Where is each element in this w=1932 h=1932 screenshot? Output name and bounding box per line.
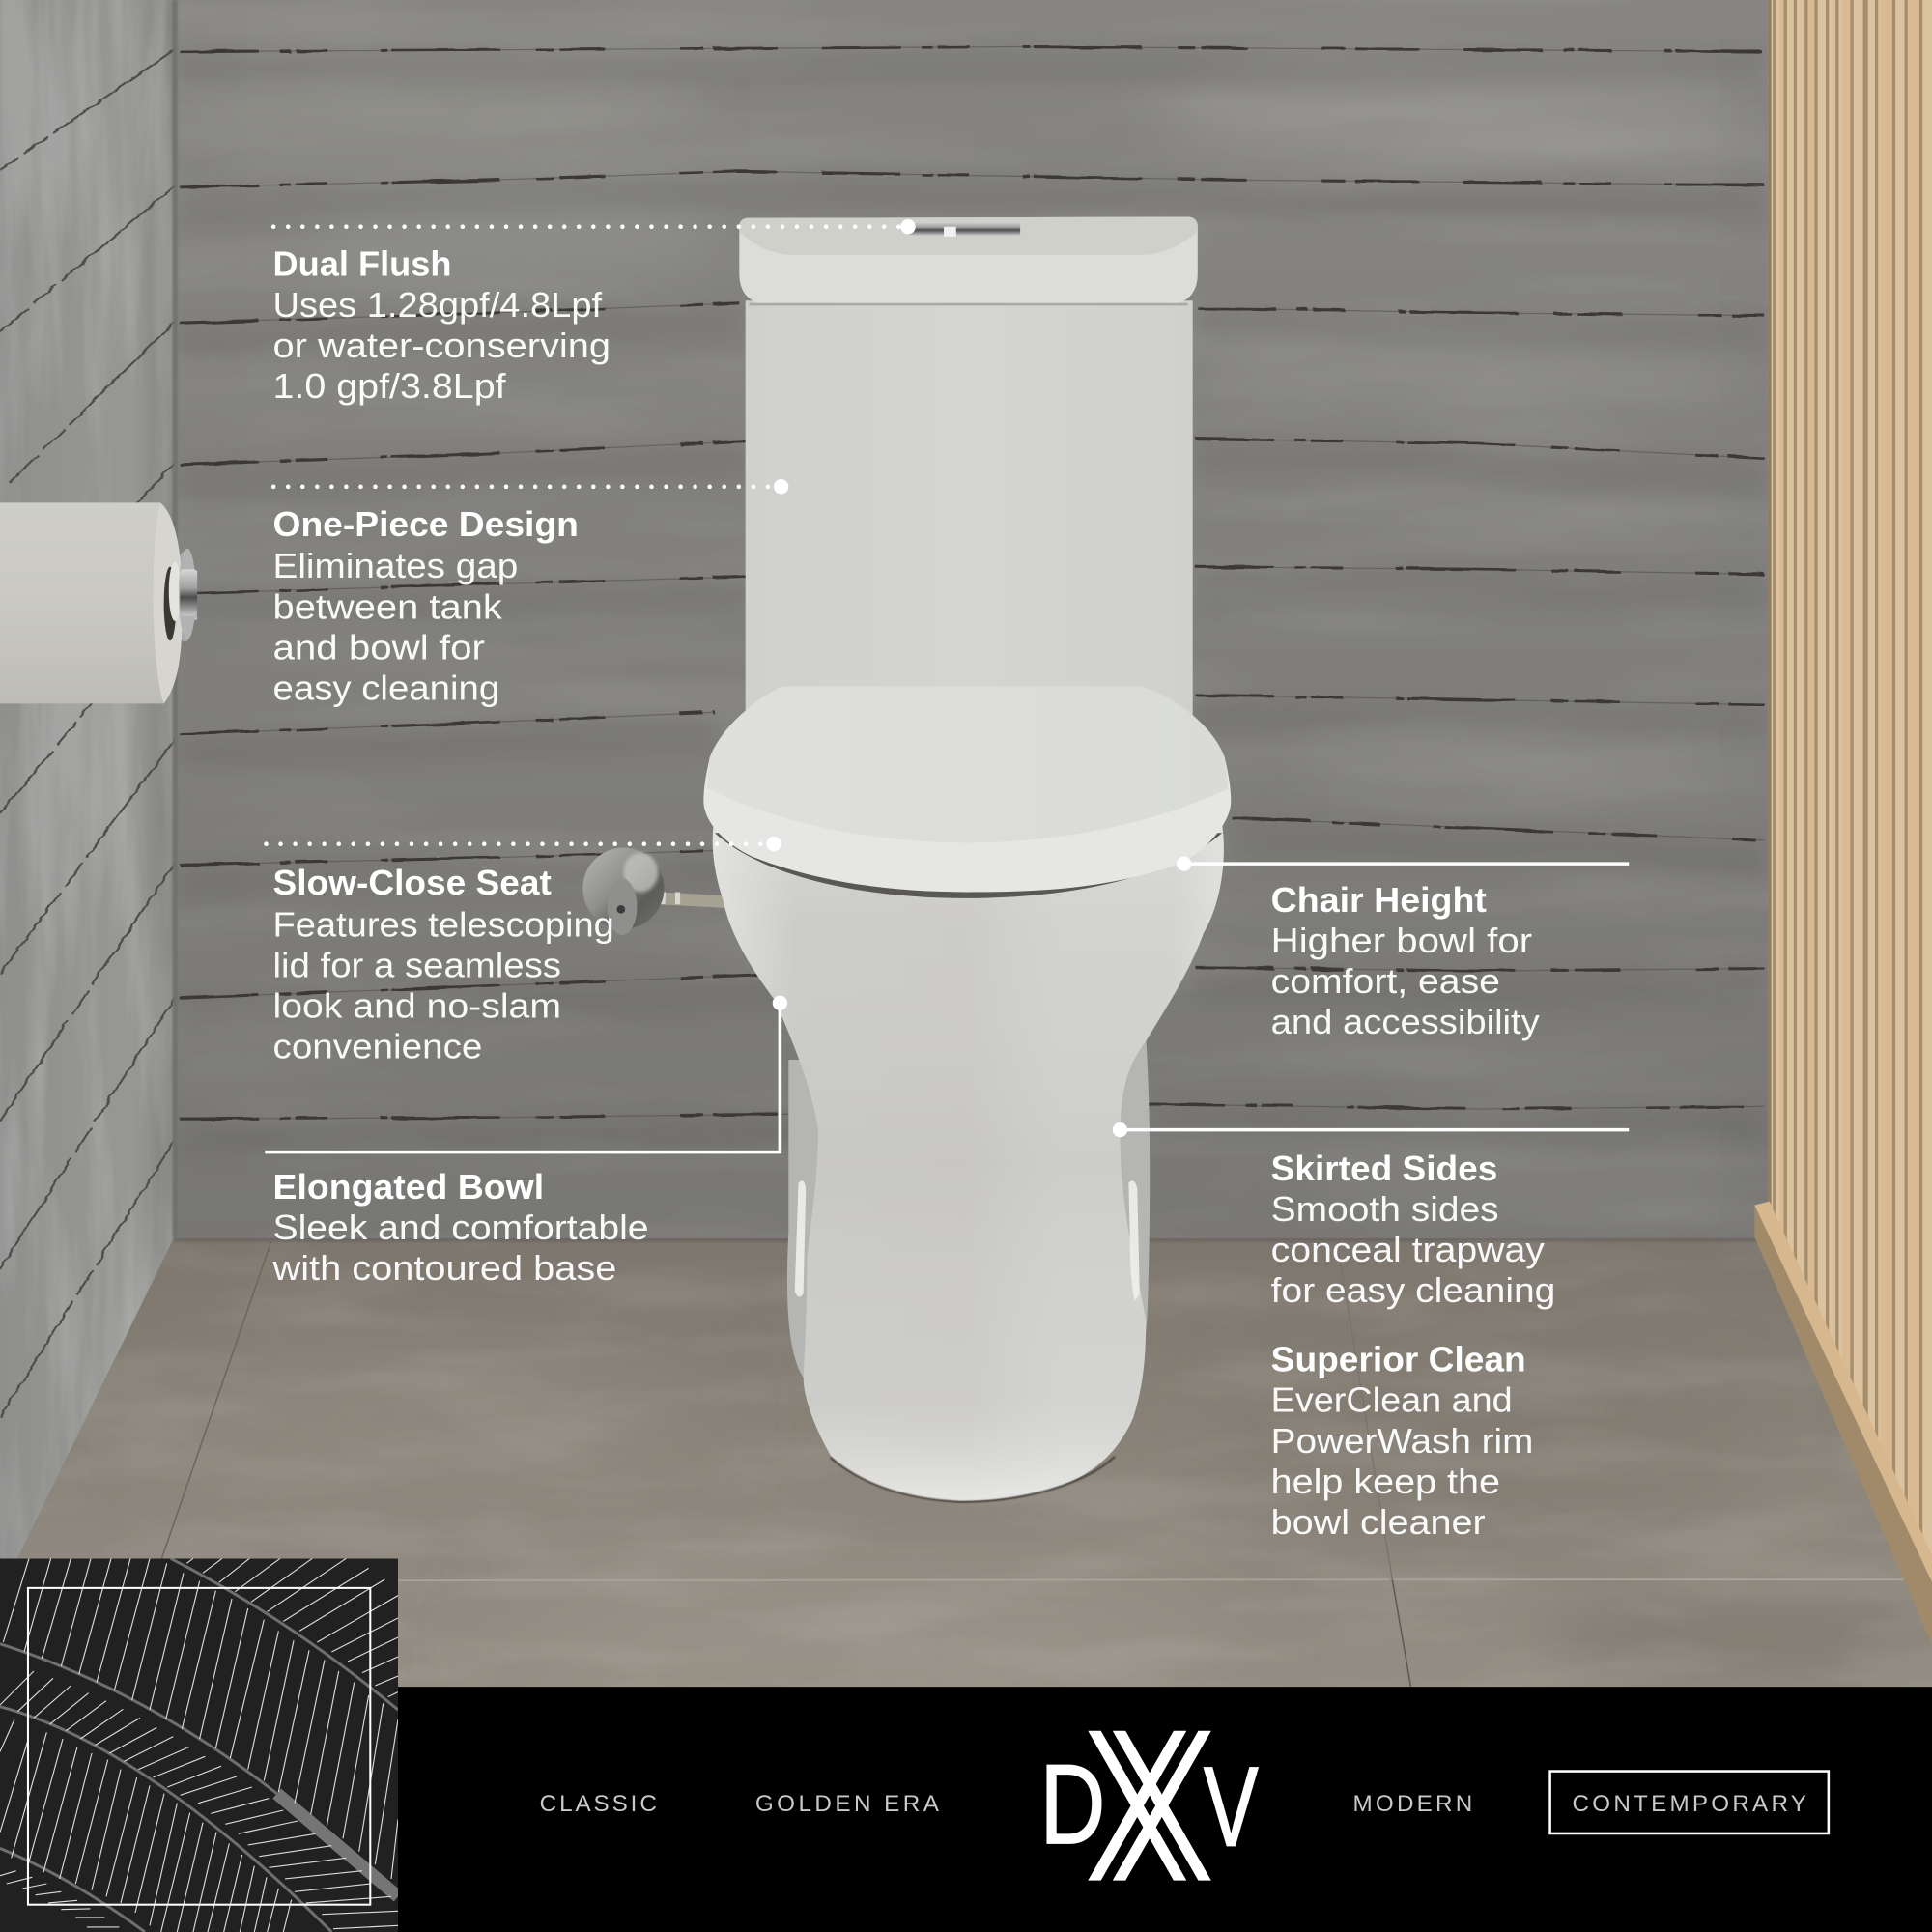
toilet skirt side panels [787,1037,1150,1392]
flush button [908,222,1020,237]
frame inside pattern [28,1588,370,1905]
nav label: Golden Era: GOLDEN ERA [755,1791,940,1817]
callout: Slow-Close Seat: Slow-Close Seat [273,864,552,902]
callout: Elongated Bowl: Elongated Bowl [273,1168,544,1207]
callout: Skirted Sides: Smooth sides [1271,1190,1499,1229]
callout: Superior Clean: bowl cleaner [1271,1503,1486,1542]
DXV logo: V [1204,1743,1259,1870]
callout: Elongated Bowl [265,996,787,1288]
toilet tank body [746,300,1193,744]
callout: One-Piece Design [273,479,788,707]
panel: bathroom back wall [160,0,1786,1240]
callout: One-Piece Design: Eliminates gap [273,547,518,585]
callout: Slow-Close Seat: convenience [273,1028,482,1066]
callout: Superior Clean: EverClean and [1271,1381,1513,1420]
icon: water supply valve [582,848,727,935]
callout: Chair Height [1177,856,1629,1041]
callout: Elongated Bowl: Sleek and comfortable [273,1208,649,1247]
nav label: Contemporary (selected): CONTEMPORARY [1573,1791,1806,1817]
callout: One-Piece Design: One-Piece Design [273,505,579,544]
callout: Slow-Close Seat: lid for a seamless [273,946,561,984]
callout: Skirted Sides: for easy cleaning [1271,1271,1555,1310]
callout: Superior Clean: PowerWash rim [1271,1422,1533,1461]
tank lid [739,216,1198,305]
callout: Slow-Close Seat: Features telescoping [273,905,614,944]
callout: One-Piece Design: and bowl for [273,628,485,667]
callout: Skirted Sides: conceal trapway [1271,1231,1545,1269]
callout: Slow-Close Seat: look and no-slam [273,987,561,1026]
callout: Chair Height: comfort, ease [1271,962,1500,1001]
callout: Superior Clean [1271,1341,1533,1542]
DXV logo [1040,1731,1259,1881]
highlight slits [795,1180,1140,1301]
bowl body [713,826,1224,1502]
callout: Superior Clean: Superior Clean [1271,1341,1526,1379]
icon: toilet paper roll and holder [0,502,197,703]
callout: Superior Clean: help keep the [1271,1463,1500,1501]
panel: architectural line pattern [0,1558,398,1932]
panel: floor tiles [0,1233,1932,1700]
callout: Slow-Close Seat [267,837,781,1066]
toilet illustration [703,216,1231,1502]
callout: Skirted Sides [1113,1122,1629,1310]
callout: Chair Height: Chair Height [1271,881,1487,920]
nav label: Contemporary (selected) [1550,1772,1829,1833]
panel: footer band [398,1687,1932,1932]
callout: Chair Height: Higher bowl for [1271,922,1532,960]
callout: One-Piece Design: between tank [273,587,502,626]
DXV logo: D [1040,1741,1105,1868]
nav label: Modern: MODERN [1353,1791,1472,1817]
panel: left side wall [0,0,178,1602]
callout: Chair Height: and accessibility [1271,1003,1540,1041]
panel: wooden slat wall [1754,0,1932,1645]
nav label: Classic: CLASSIC [540,1791,657,1817]
callout: Dual Flush: Uses 1.28gpf/4.8Lpf [273,286,602,325]
callout: Elongated Bowl: with contoured base [271,1249,616,1288]
callout: Dual Flush: Dual Flush [273,245,451,284]
callout: One-Piece Design: easy cleaning [273,668,499,707]
callout: Dual Flush: 1.0 gpf/3.8Lpf [273,367,506,406]
callout: Skirted Sides: Skirted Sides [1271,1150,1497,1188]
seat lid [703,686,1231,898]
callout: Dual Flush [273,219,916,406]
callout: Dual Flush: or water-conserving [273,327,611,365]
